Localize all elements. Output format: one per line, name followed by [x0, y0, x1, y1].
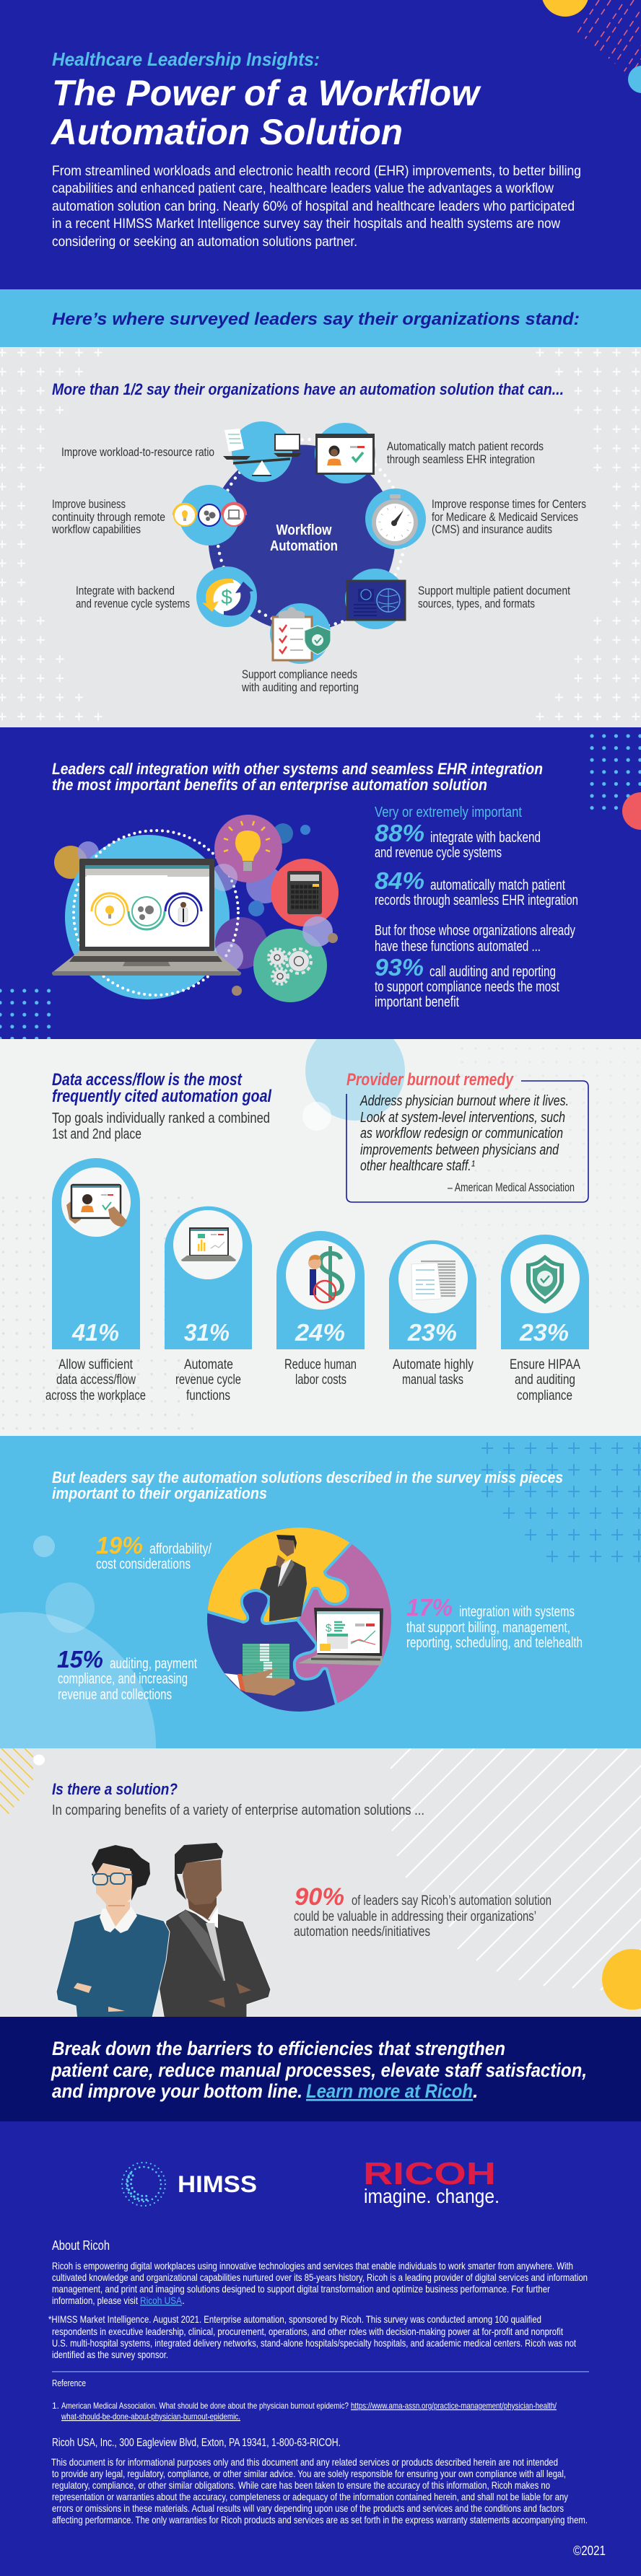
statistics: Very or extremely important [375, 805, 522, 820]
survey note: identified as the survey sponsor. [52, 2349, 168, 2360]
bar: 24% labor costs [276, 1231, 365, 1388]
reference: Reference [52, 2378, 86, 2388]
stat: 90% [294, 1883, 551, 1940]
stat: 90%: of leaders say Ricoh’s automation solution [352, 1893, 551, 1909]
bar: 23% manual tasks [389, 1240, 476, 1388]
bar: 41% data access: 41% [71, 1319, 119, 1346]
statistics: 84% [375, 867, 424, 894]
heading: the most important benefits of an enterprise automation solution [52, 776, 487, 794]
bar: 41% data access: across the workplace [45, 1388, 146, 1403]
callout: provider burnout remedy: improvements between physicians and [360, 1142, 559, 1158]
gears [269, 949, 311, 984]
bar: 31% revenue cycle: functions [186, 1388, 230, 1403]
survey note: *HIMSS Market Intelligence. August 2021. Enterprise automation, sponsored by Ricoh. This survey was conducted among 100 qualified [48, 2313, 541, 2325]
wheel labels: and revenue cycle systems [76, 597, 190, 610]
title [50, 73, 481, 152]
bar: 23% HIPAA compliance: and auditing [515, 1372, 575, 1388]
panel: footer [0, 2121, 641, 2576]
callout: provider burnout remedy: Provider burnout remedy [346, 1070, 514, 1090]
about Ricoh: About Ricoh [52, 2238, 110, 2253]
man [260, 1560, 307, 1621]
stat: 15% [57, 1646, 197, 1703]
callout: provider burnout remedy: Look at system-level interventions, such [360, 1110, 565, 1126]
statistics: and revenue cycle systems [375, 845, 502, 861]
icon: revenue cycle [196, 566, 257, 627]
stat: 19%: cost considerations [96, 1556, 191, 1572]
bar: 24% labor costs: 24% [295, 1319, 345, 1346]
statistics: to support compliance needs the most [375, 979, 559, 995]
intro paragraph: capabilities and enhanced patient care, healthcare leaders value the advantages a workflow [52, 180, 554, 196]
statistics: integrate with backend [430, 830, 541, 846]
reference: American Medical Association. What should be done about the physician burnout epidemic? [61, 2401, 349, 2411]
bar: 23% manual tasks: 23% [407, 1319, 457, 1346]
laptop [79, 859, 214, 951]
heading: important to their organizations [52, 1484, 267, 1502]
bar: 31% revenue cycle: 31% [184, 1319, 230, 1346]
stat: 90%: 90% [295, 1883, 344, 1911]
panel: automation goals [0, 1021, 641, 1436]
bar: 23% manual tasks: manual tasks [402, 1372, 463, 1388]
wheel labels: with auditing and reporting [241, 680, 359, 694]
statistics: records through seamless EHR integration [375, 893, 578, 908]
logo: Ricoh [363, 2156, 500, 2207]
illustration: laptop with idea bubbles [52, 815, 339, 1002]
statistics: automatically match patient [430, 877, 565, 893]
heading: More than 1/2 say their organizations have an automation solution that can... [52, 380, 564, 398]
bar: 41% data access [45, 1158, 146, 1403]
stat: 19%: 19% [96, 1532, 143, 1559]
callout: provider burnout remedy: – American Medical Association [448, 1180, 575, 1194]
stat: 19% [96, 1532, 212, 1572]
panel: automation solution wheel [0, 347, 641, 727]
callout: provider burnout remedy [346, 1070, 588, 1202]
wheel labels [51, 439, 586, 694]
bar: 41% data access: Allow sufficient [58, 1357, 133, 1372]
panel: is there a solution [0, 1748, 641, 2020]
heading [52, 1070, 272, 1106]
money and hand [243, 1644, 289, 1679]
heading: Data access/flow is the most [52, 1070, 243, 1090]
central hub: Automation [270, 538, 338, 554]
wheel labels: Support multiple patient document [418, 584, 570, 597]
stat: 17%: reporting, scheduling, and telehealth [406, 1635, 583, 1651]
reference [52, 2378, 557, 2422]
illustration: two leaders [56, 1843, 271, 2020]
stat: 15%: revenue and collections [58, 1687, 172, 1703]
about Ricoh: . [182, 2295, 185, 2306]
icon: stopwatch [365, 489, 426, 549]
icon: revenue cycle: $ [221, 586, 232, 608]
wheel labels: Improve response times for Centers [432, 497, 586, 511]
callout: provider burnout remedy: Address physician burnout where it lives. [359, 1093, 569, 1109]
reference: 1. [52, 2401, 59, 2411]
title: Automation Solution [50, 112, 403, 152]
bar: 31% revenue cycle: Automate [184, 1357, 233, 1372]
copyright: ©2021 [573, 2544, 606, 2558]
statistics: call auditing and reporting [429, 964, 556, 980]
icon: document monitor [345, 569, 406, 629]
bar: 24% labor costs: Reduce human [284, 1357, 357, 1372]
bar: 23% HIPAA compliance: 23% [519, 1319, 569, 1346]
stat: 19%: affordability/ [149, 1541, 212, 1557]
heading: Leaders call integration with other systems and seamless EHR integration [52, 760, 543, 778]
banner: call to action: and improve your bottom line. [52, 2080, 302, 2102]
wheel labels: Automatically match patient records [387, 439, 544, 453]
intro paragraph: automation solution can bring. Nearly 60% of hospital and healthcare leaders who participated [52, 198, 575, 214]
logo: HIMSS: HIMSS [178, 2171, 257, 2197]
bar: 23% manual tasks: Automate highly [393, 1357, 474, 1372]
logo: HIMSS [122, 2163, 257, 2206]
stat: 90%: automation needs/initiatives [294, 1924, 430, 1940]
heading: But leaders say the automation solutions described in the survey miss pieces [52, 1468, 563, 1486]
intro paragraph [52, 163, 581, 250]
central hub [208, 439, 405, 632]
heading: frequently cited automation goal [52, 1087, 272, 1106]
banner: call to action: patient care, reduce manual processes, elevate staff satisfaction, [51, 2059, 587, 2081]
statistics: But for those whose organizations already [375, 923, 575, 939]
kicker: Healthcare Leadership Insights: [52, 48, 320, 70]
stat: 15%: auditing, payment [110, 1656, 197, 1672]
statistics: 93% [375, 954, 424, 981]
stat: 15%: compliance, and increasing [58, 1671, 188, 1687]
reference: https://www.ama-assn.org/practice-management/physician-health/ [351, 2401, 557, 2411]
disclaimer [51, 2456, 588, 2525]
laptop [314, 1608, 383, 1656]
wheel labels: Integrate with backend [76, 584, 175, 597]
wheel labels: Improve business [52, 497, 126, 511]
wheel labels: continuity through remote [52, 510, 165, 524]
illustration: puzzle circle: $ [326, 1622, 332, 1634]
stat: 15%: 15% [57, 1646, 103, 1673]
wheel labels: for Medicare & Medicaid Services [432, 510, 578, 524]
intro paragraph: considering or seeking an automation solutions partner. [52, 234, 357, 250]
about Ricoh [52, 2238, 588, 2306]
address: Ricoh USA, Inc., 300 Eagleview Blvd, Exton, PA 19341, 1-800-63-RICOH. [52, 2437, 341, 2449]
calculator [287, 871, 322, 914]
heading: Is there a solution? [52, 1780, 178, 1798]
intro paragraph: in a recent HIMSS Market Intelligence survey say their hospitals and health systems are now [52, 216, 561, 232]
decoration: header shapes [541, 0, 641, 93]
heading [52, 1468, 563, 1502]
bar: 23% HIPAA compliance: compliance [517, 1388, 572, 1403]
bar: 23% HIPAA compliance [501, 1235, 589, 1403]
banner: where leaders stand [0, 289, 641, 347]
banner: call to action: Learn more at Ricoh [306, 2080, 473, 2102]
subheading: Top goals individually ranked a combined [52, 1110, 270, 1126]
icon: scales [223, 421, 302, 482]
about Ricoh: Ricoh USA [140, 2295, 183, 2306]
callout: provider burnout remedy: other healthcare staff.¹ [360, 1158, 475, 1174]
banner: where leaders stand: Here’s where surveyed leaders say their organizations stand: [52, 310, 580, 329]
stat: 17%: integration with systems [459, 1604, 575, 1620]
bulb [235, 831, 261, 861]
statistics: important benefit [375, 994, 459, 1010]
intro paragraph: From streamlined workloads and electronic health record (EHR) improvements, to better billing [52, 163, 581, 179]
heading [52, 760, 543, 794]
bar: 31% revenue cycle [165, 1206, 252, 1403]
survey note [48, 2313, 576, 2360]
statistics: 88% [375, 820, 424, 846]
stat: 17% [406, 1594, 583, 1651]
panel: missing pieces [0, 1436, 641, 1748]
title: The Power of a Workflow [52, 73, 481, 113]
stat: 17%: 17% [406, 1594, 453, 1621]
wheel labels: through seamless EHR integration [387, 452, 535, 466]
man [159, 1909, 271, 2020]
icon: compliance clipboard [270, 603, 331, 664]
statistics: have these functions automated ... [375, 939, 541, 955]
statistics [375, 805, 578, 1010]
stat: 17%: that support billing, management, [406, 1620, 570, 1636]
logo: Ricoh: RICOH [363, 2156, 496, 2191]
woman [56, 1914, 170, 2020]
subheading [52, 1110, 270, 1142]
screen rings [95, 896, 124, 925]
reference: what-should-be-done-about-physician-burnout-epidemic. [61, 2411, 240, 2422]
subheading: 1st and 2nd place [52, 1126, 141, 1142]
callout: provider burnout remedy: as workflow redesign or communication [360, 1126, 563, 1142]
banner: call to action [0, 2017, 641, 2121]
stat: 90%: could be valuable in addressing their organizations’ [294, 1909, 536, 1924]
wheel labels: Improve workload-to-resource ratio [61, 445, 214, 459]
illustration: puzzle circle [207, 1528, 391, 1712]
central hub: Workflow [276, 522, 332, 538]
wheel labels: Support compliance needs [242, 667, 357, 681]
banner: call to action: . [473, 2080, 479, 2102]
wheel labels: (CMS) and insurance audits [432, 522, 552, 536]
about Ricoh: information, please visit [52, 2295, 138, 2306]
bar: 24% labor costs: labor costs [295, 1372, 346, 1388]
bar: 23% HIPAA compliance: Ensure HIPAA [510, 1357, 580, 1372]
bar: 31% revenue cycle: revenue cycle [175, 1372, 241, 1388]
wheel labels: sources, types, and formats [418, 597, 535, 610]
logo: Ricoh: imagine. change. [364, 2185, 500, 2207]
icon: patient record monitor [315, 423, 375, 483]
panel: header [51, 0, 641, 249]
icon: remote continuity rings [173, 485, 246, 546]
banner: call to action: Break down the barriers to efficiencies that strengthen [52, 2038, 505, 2059]
wheel labels: workflow capabilities [51, 522, 141, 536]
bar: 41% data access: data access/flow [56, 1372, 136, 1388]
panel: most important benefits [0, 727, 641, 1039]
subheading: In comparing benefits of a variety of enterprise automation solutions ... [52, 1802, 424, 1818]
